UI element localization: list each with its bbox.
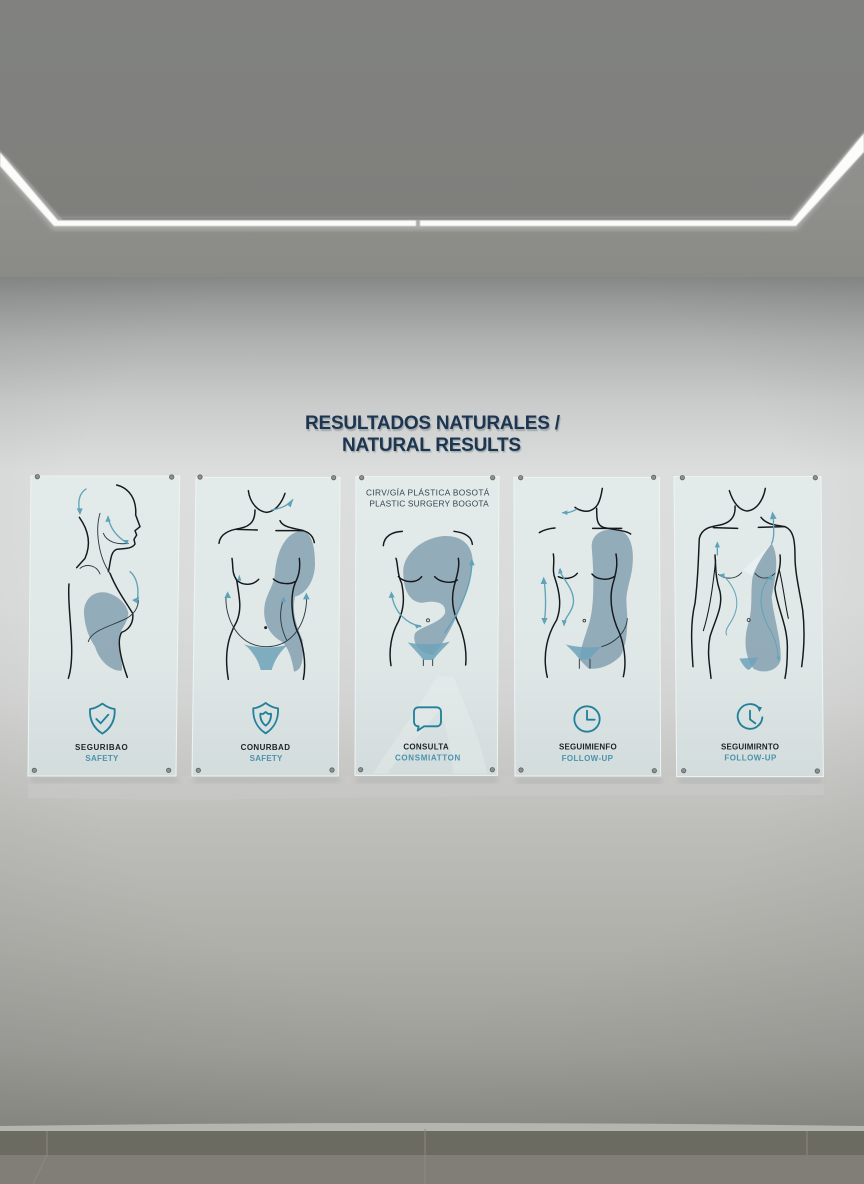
label: seguimiento: FOLLOW-UP	[562, 754, 614, 763]
figure: torso	[383, 531, 475, 666]
label: seguimiento: SEGUIMIRNTO	[721, 743, 779, 752]
label: consulta	[395, 742, 461, 762]
label: safety	[241, 743, 290, 763]
figure: torso front	[219, 491, 315, 679]
icon: shield	[253, 703, 278, 733]
title: RESULTADOS NATURALES /	[305, 413, 561, 434]
label: seguridad: SAFETY	[85, 754, 119, 763]
label: consulta: CONSULTA	[403, 742, 449, 751]
panel 1: seguridad	[28, 474, 180, 776]
label: seguimiento: SEGUIMIENFO	[559, 743, 617, 752]
ceiling	[0, 0, 864, 278]
ghost silhouette	[373, 677, 487, 773]
label: consulta: CONSMIATTON	[395, 753, 461, 762]
figure: face and torso	[68, 485, 140, 678]
clinic heading	[366, 487, 490, 509]
label: seguridad	[75, 743, 128, 763]
figure: torso	[539, 488, 633, 677]
icon: clock	[574, 706, 600, 732]
wall	[0, 277, 864, 1127]
panel reflection band	[28, 776, 824, 800]
icon: shield check	[90, 704, 115, 734]
label: seguimiento	[721, 743, 779, 763]
label: seguimiento	[559, 743, 617, 763]
panel 3: consulta	[355, 475, 499, 775]
baseboard and floor	[0, 1123, 864, 1184]
figure: torso with arms	[692, 488, 804, 678]
panel 4: seguimiento	[514, 475, 661, 776]
title: NATURAL RESULTS	[343, 436, 522, 458]
clinic heading: CIRV/GÍA PLÁSTICA BOSOTÁ	[366, 487, 490, 497]
title: NATURAL RESULTS	[342, 435, 521, 456]
label: seguimiento: FOLLOW-UP	[724, 754, 777, 763]
label: seguridad: SEGURIBAO	[75, 743, 128, 752]
title	[305, 413, 562, 458]
title: RESULTADOS NATURALES /	[306, 415, 562, 436]
clinic heading: PLASTIC SURGERY BOGOTA	[369, 499, 489, 509]
label: safety: CONURBAD	[241, 743, 290, 752]
panel 2: safety	[192, 475, 340, 776]
panel 5: seguimiento	[674, 475, 823, 777]
icon: speech bubble	[414, 707, 441, 731]
label: safety: SAFETY	[250, 754, 283, 763]
ceiling light strip	[0, 133, 864, 226]
icon: clock with arrow	[738, 704, 762, 729]
